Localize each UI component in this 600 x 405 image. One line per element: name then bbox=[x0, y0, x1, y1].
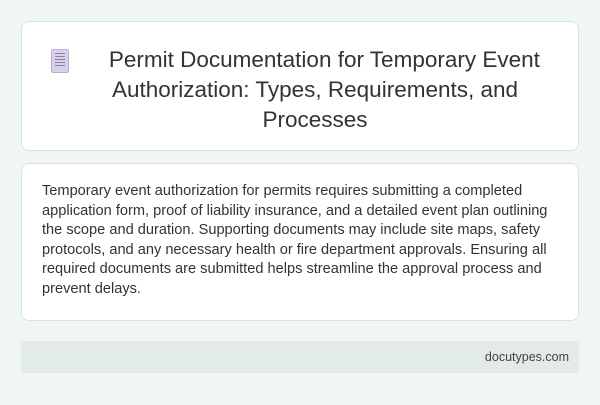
icon: document bbox=[51, 49, 69, 73]
text block: Temporary event authorization for permits requires submitting a completed application form, proof of liability insurance, and a detailed event plan outlining the scope and duration. Supporting documents may include site maps, safety protocols, and any necessary health or fire department approvals. Ensuring all required documents are submitted helps streamline the approval process and prevent delays. bbox=[42, 183, 547, 297]
footer bbox=[21, 341, 579, 373]
footer text: docutypes.com bbox=[485, 350, 569, 364]
panel: header bbox=[21, 21, 579, 151]
panel: description bbox=[21, 163, 579, 321]
title: Permit Documentation for Temporary Event Authorization: Types, Requirements, and Processes bbox=[109, 47, 540, 132]
